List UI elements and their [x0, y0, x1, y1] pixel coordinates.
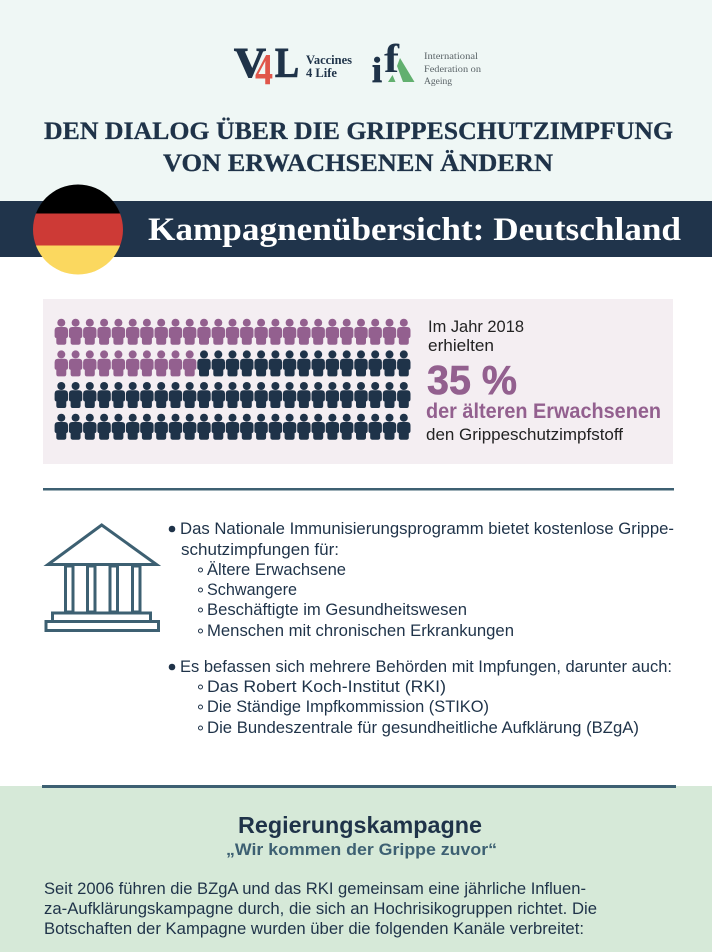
text block: campaign description: za-Aufklärungskampagne durch, die sich an Hochrisikogruppen richtet. Die [44, 899, 597, 918]
logo: International Federation on Ageing: International [424, 52, 478, 62]
statistic text: den Grippeschutzimpfstoff [426, 425, 623, 444]
statistic text: der älteren Erwachsenen [426, 399, 661, 423]
logo: International Federation on Ageing: Federation on [424, 65, 481, 75]
text block: immunisation programme: Ältere Erwachsene [207, 560, 346, 579]
text block: immunisation programme: schutzimpfungen für: [181, 540, 339, 559]
text block: campaign description [44, 879, 597, 938]
text block: authorities: Es befassen sich mehrere Behörden mit Impfungen, darunter auch: [180, 657, 672, 676]
statistic text: erhielten [428, 336, 494, 355]
text block: immunisation programme: Menschen mit chronischen Erkrankungen [207, 621, 514, 640]
logo: International Federation on Ageing: f [384, 36, 400, 81]
panel: vaccination rate [43, 299, 673, 464]
statistic text: Im Jahr 2018 [428, 317, 524, 336]
banner [0, 201, 712, 257]
statistic text: 35 % [427, 357, 517, 403]
heading: Regierungskampagne [238, 812, 482, 838]
panel: government campaign [0, 785, 712, 952]
text block: authorities: Die Ständige Impfkommission (STIKO) [207, 697, 489, 716]
logo: Vaccines 4 Life: Vaccines [306, 53, 352, 67]
subheading: „Wir kommen der Grippe zuvor“ [226, 840, 497, 859]
logo: International Federation on Ageing: i [372, 50, 382, 90]
text block: immunisation programme: Schwangere [207, 580, 297, 599]
title [44, 118, 673, 177]
text block: authorities: Das Robert Koch-Institut (RKI) [207, 677, 446, 696]
logo: Vaccines 4 Life: 4 Life [306, 66, 337, 80]
text block: authorities [169, 657, 672, 737]
chart: people pictogram [55, 319, 410, 440]
text block: immunisation programme: Das Nationale Immunisierungsprogramm bietet kostenlose Grippe- [180, 519, 674, 538]
icon: German flag [33, 184, 123, 276]
logo: Vaccines 4 Life: V [234, 41, 266, 87]
title: DEN DIALOG ÜBER DIE GRIPPESCHUTZIMPFUNG [44, 118, 673, 145]
banner heading: Kampagnenübersicht: Deutschland [148, 212, 681, 248]
logo: Vaccines 4 Life: 4 [255, 45, 273, 94]
text block: immunisation programme [169, 519, 674, 640]
title: VON ERWACHSENEN ÄNDERN [163, 150, 553, 177]
logo: Vaccines 4 Life: L [275, 41, 299, 87]
statistic text [426, 317, 661, 444]
logo: International Federation on Ageing: Ageing [424, 77, 452, 87]
panel: header background [0, 0, 712, 201]
icon: government building [46, 525, 158, 630]
logo: Vaccines 4 Life [234, 41, 352, 94]
logo: International Federation on Ageing [372, 36, 481, 90]
text block: authorities: Die Bundeszentrale für gesundheitliche Aufklärung (BZgA) [207, 718, 639, 737]
text block: immunisation programme: Beschäftigte im Gesundheitswesen [207, 600, 467, 619]
text block: campaign description: Botschaften der Kampagne wurden über die folgenden Kanäle verbreitet: [44, 919, 584, 938]
text block: campaign description: Seit 2006 führen die BZgA und das RKI gemeinsam eine jährliche Influen- [44, 879, 586, 898]
